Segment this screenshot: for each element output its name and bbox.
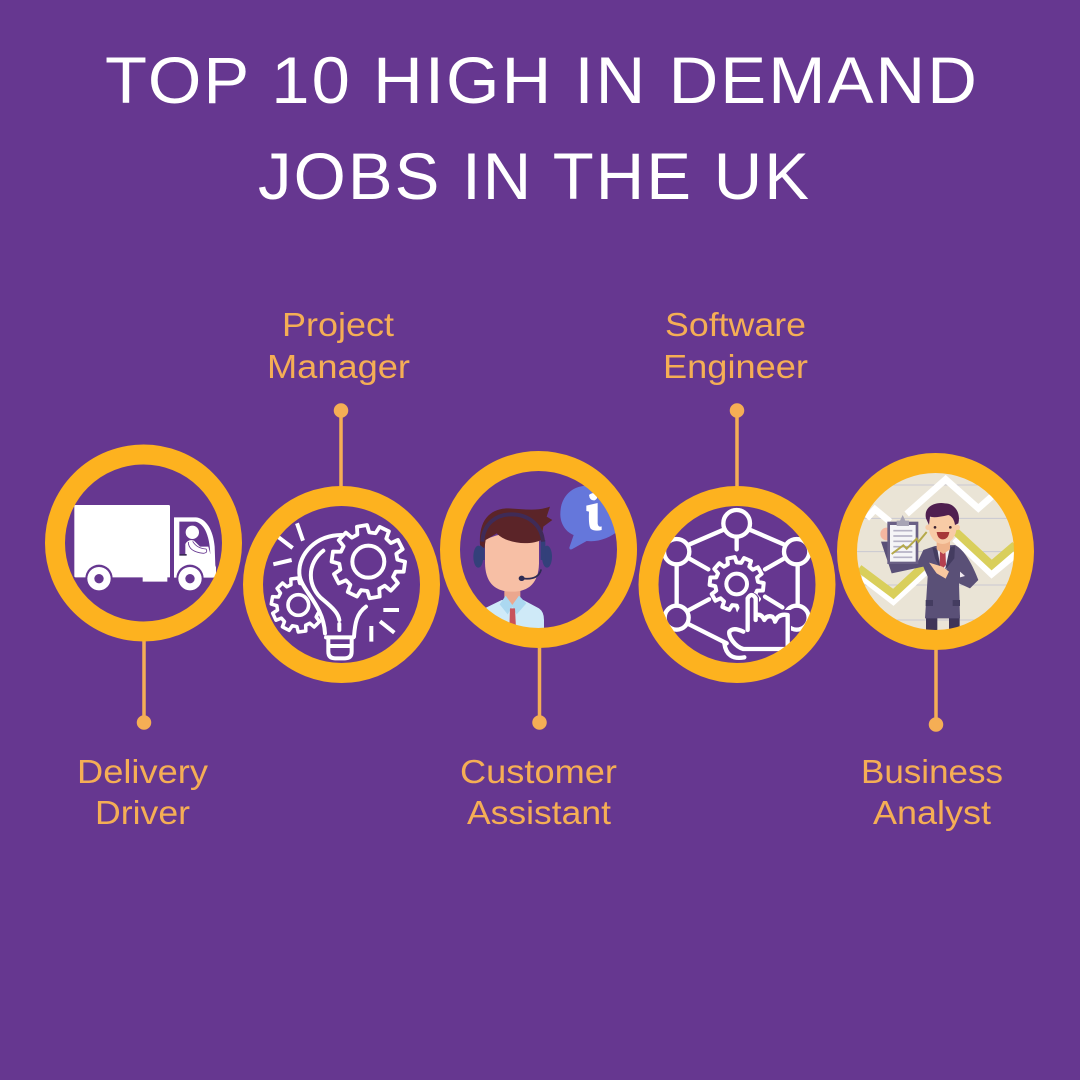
label: software engineer: Software	[665, 307, 806, 344]
label: delivery driver: Delivery	[77, 754, 208, 791]
icon: network with gear and pointing hand	[664, 510, 809, 658]
label: software engineer	[663, 307, 808, 386]
connector: project manager	[334, 404, 348, 488]
label: project manager: Project	[282, 307, 395, 344]
ring: business analyst	[847, 463, 1024, 640]
connector: software engineer	[730, 404, 744, 488]
connector: customer assistant	[533, 646, 546, 729]
ring: delivery driver	[55, 454, 232, 632]
label: project manager	[267, 307, 410, 386]
icon: business analyst with chart	[854, 470, 1017, 633]
ring: customer assistant	[450, 461, 627, 638]
label: business analyst	[861, 754, 1003, 832]
label: customer assistant	[460, 754, 617, 832]
label: project manager: Manager	[267, 349, 410, 386]
label: delivery driver: Driver	[95, 795, 190, 832]
label: business analyst: Business	[861, 754, 1003, 791]
ring: project manager	[253, 496, 430, 673]
connector: business analyst	[930, 648, 942, 731]
label: customer assistant: Customer	[460, 754, 617, 791]
label: delivery driver	[77, 754, 208, 832]
label: customer assistant: Assistant	[467, 795, 612, 832]
label: business analyst: Analyst	[873, 795, 992, 832]
icon: light bulb and gears	[267, 521, 409, 658]
label: software engineer: Engineer	[663, 349, 808, 386]
title	[105, 43, 979, 213]
title: TOP 10 HIGH IN DEMAND	[105, 43, 979, 117]
title: JOBS IN THE UK	[258, 139, 811, 213]
connector: delivery driver	[138, 640, 150, 729]
ring: software engineer	[648, 496, 826, 673]
icon: customer assistant with headset	[473, 486, 622, 635]
icon: delivery truck	[74, 505, 216, 592]
